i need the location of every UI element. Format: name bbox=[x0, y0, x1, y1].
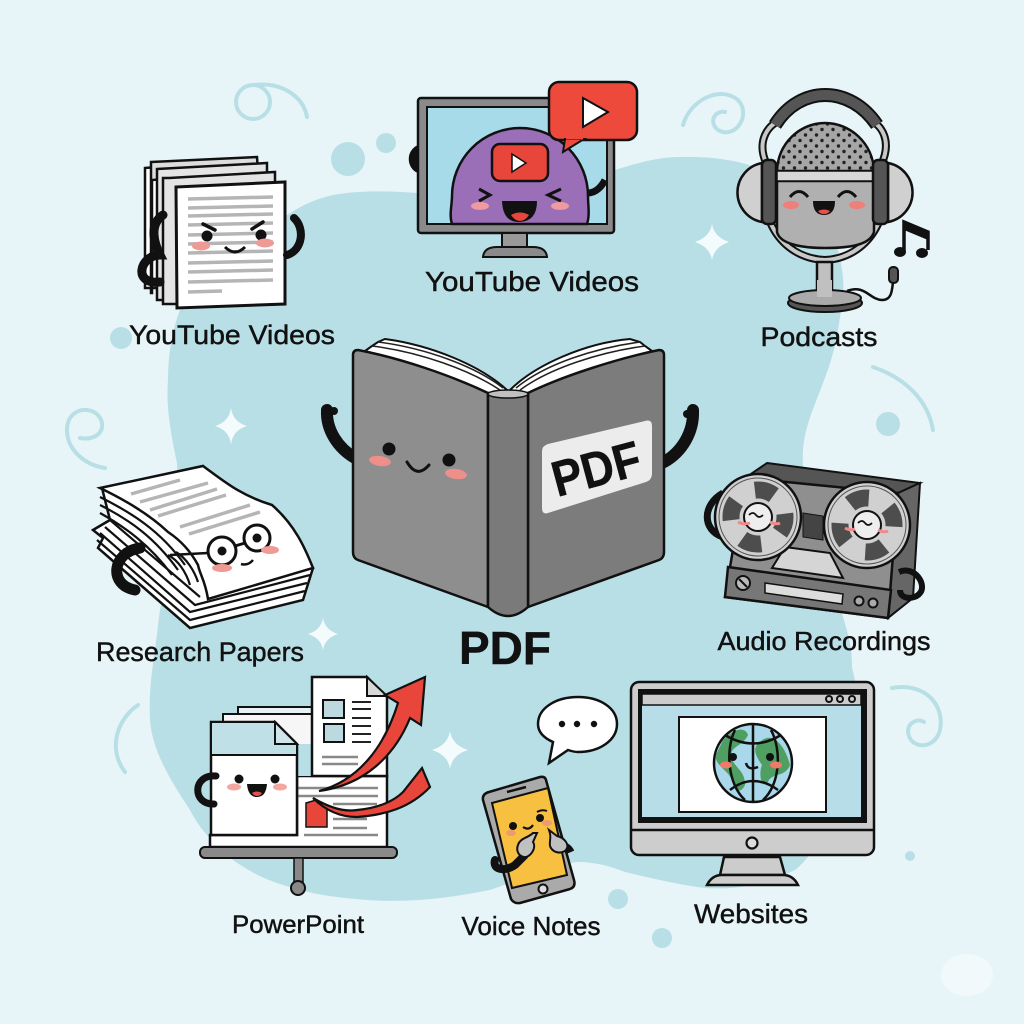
panel: central PDF book: PDF bbox=[546, 430, 647, 508]
panel: central PDF book bbox=[327, 339, 693, 616]
label: PowerPoint: PowerPoint bbox=[232, 911, 364, 939]
panel: research papers bbox=[93, 466, 313, 628]
background blob bbox=[150, 157, 859, 901]
watermark bbox=[941, 954, 993, 996]
label: research papers: Research Papers bbox=[96, 637, 304, 667]
panel: podcast microphone bbox=[737, 95, 913, 312]
panel: website monitor bbox=[631, 682, 874, 885]
label: audio recordings: Audio Recordings bbox=[718, 626, 930, 656]
label: documents: YouTube Videos bbox=[129, 320, 335, 350]
panel: YouTube monitor bbox=[410, 82, 637, 257]
label: PDF: PDF bbox=[459, 622, 551, 674]
decorative swirls and dots bbox=[67, 85, 941, 772]
label: voice notes: Voice Notes bbox=[462, 911, 600, 941]
icon: music notes bbox=[894, 222, 928, 258]
panel: documents stack bbox=[142, 157, 301, 308]
panel: smartphone bbox=[483, 777, 574, 903]
label: websites: Websites bbox=[694, 899, 808, 929]
panel: reel-to-reel recorder bbox=[707, 463, 922, 618]
icon: speech bubble bbox=[538, 697, 617, 763]
panel: PowerPoint bbox=[198, 677, 430, 895]
label: YouTube: YouTube Videos bbox=[425, 266, 639, 297]
label: podcasts: Podcasts bbox=[760, 322, 878, 352]
sparkles bbox=[215, 224, 729, 769]
